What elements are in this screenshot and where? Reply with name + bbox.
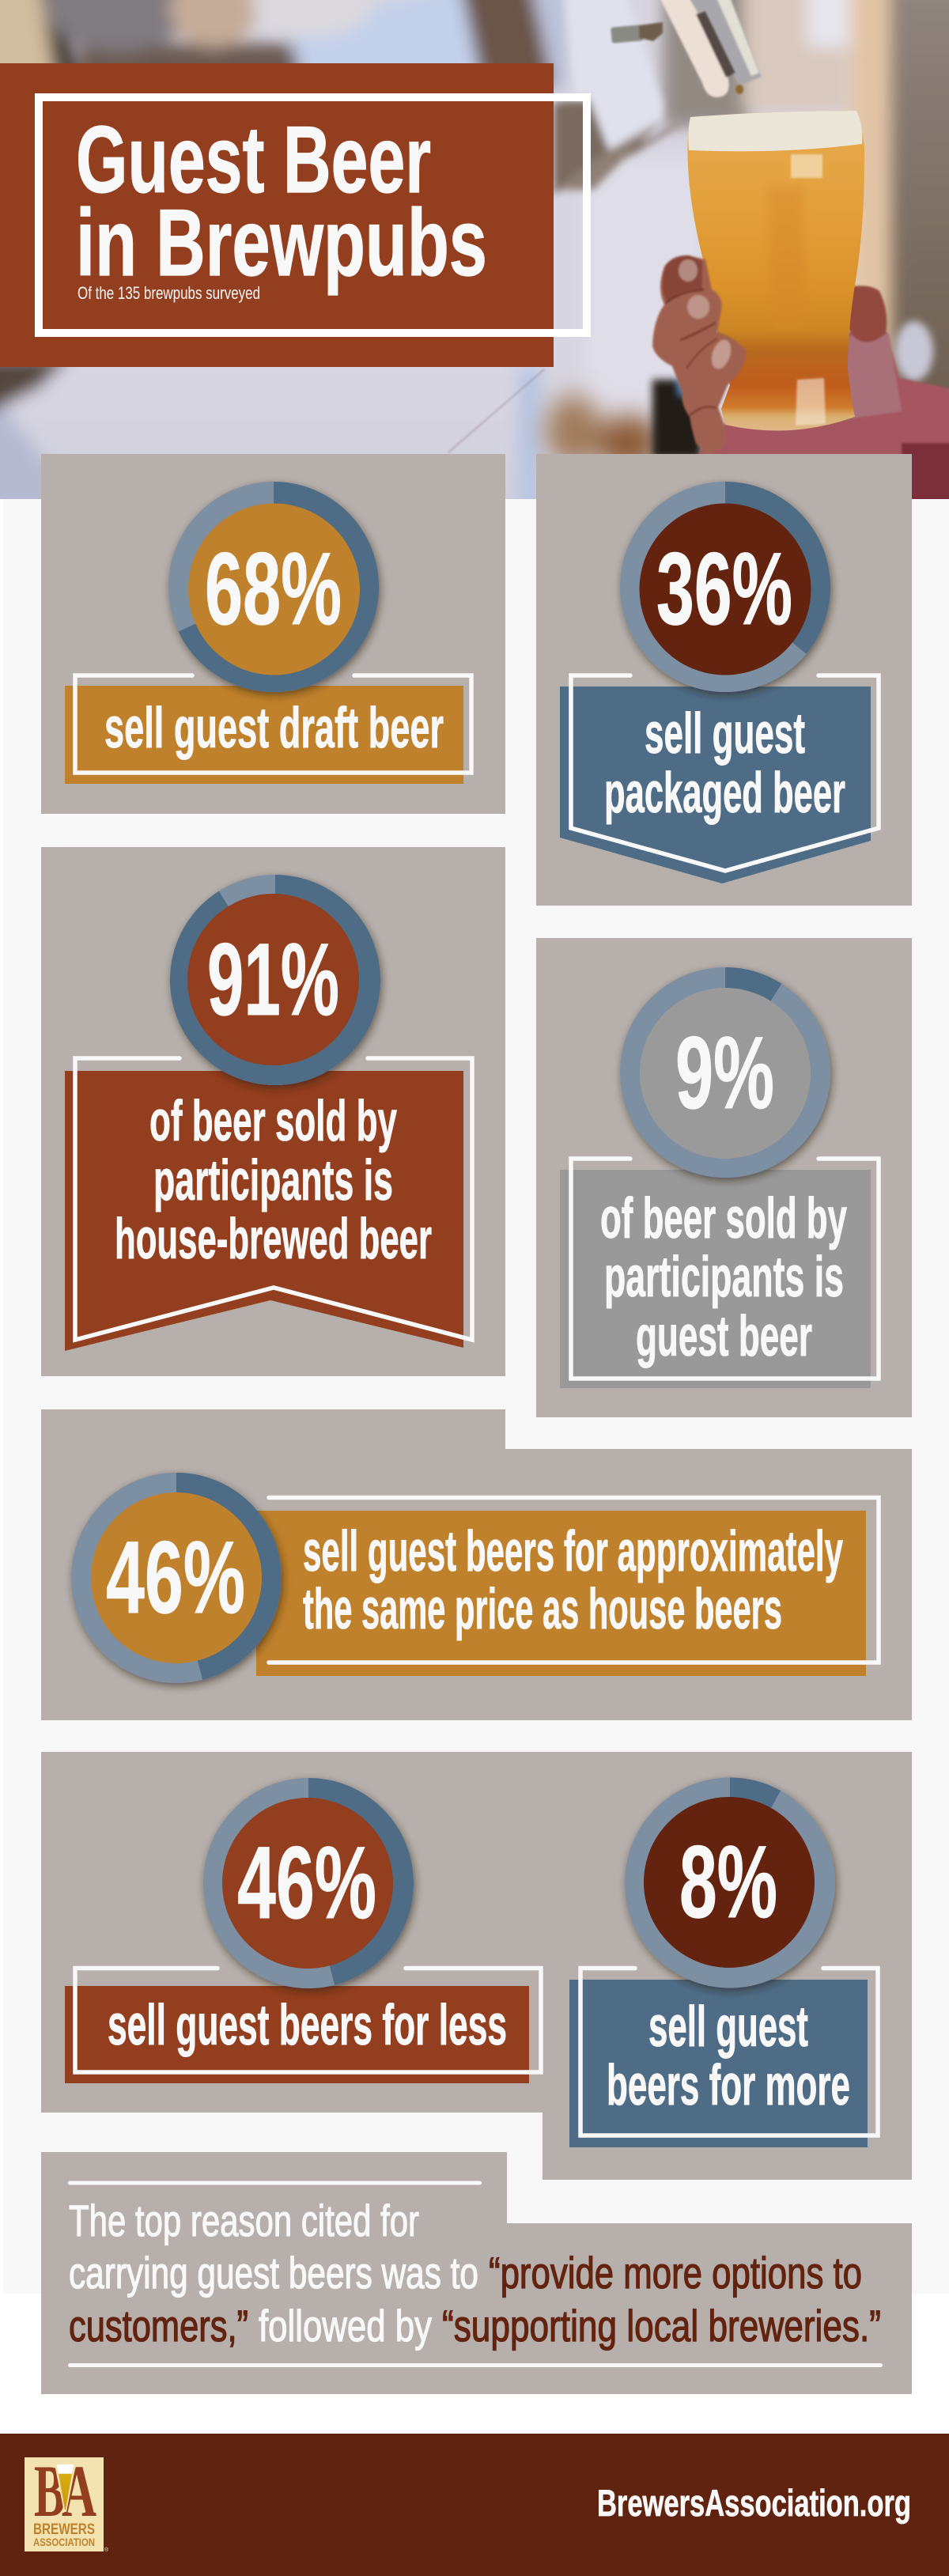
logo: Brewers Association: ASSOCIATION [33,2536,95,2548]
title [76,107,487,296]
panel: 68% sell guest draft beer [41,454,505,814]
icon: glass of beer [687,111,864,431]
donut chart 8% more: 8% [679,1824,777,1939]
label: sell for less: sell guest beers for less [108,1994,507,2057]
logo: Brewers Association: ® [104,2547,109,2553]
icon: fingers in front of glass [652,255,747,456]
page background [3,499,949,2294]
donut chart 9% [620,967,830,1178]
donut chart 9%: 9% [675,1015,774,1130]
ribbon [256,1511,866,1676]
panel: 36% sell guest packaged beer [536,454,912,906]
panel: top reason quote [41,2152,912,2394]
title: in Brewpubs [76,190,487,296]
frame [75,1058,472,1340]
label: sell guest [645,702,805,766]
label: house-brewed beer [115,1208,432,1271]
donut chart 36% [620,482,830,692]
panel: pricing 46% and 8% [41,1752,912,2180]
quote text [69,2196,881,2351]
ribbon: sell for less [65,1986,529,2083]
donut chart 8% more [625,1778,835,1988]
donut chart 46%: 46% [106,1519,245,1635]
label [600,1187,847,1368]
donut chart 68% [168,482,379,692]
label: sell guest draft beer [104,697,444,760]
quote text: The top reason cited for [69,2196,419,2245]
ribbon [65,1071,463,1351]
panel: 91% house-brewed beer [41,847,505,1376]
photo: beer glass held under a tap [0,0,949,522]
frame [75,675,471,773]
title: Guest Beer [76,107,431,213]
panel: 46% same price [41,1409,912,1720]
logo: Brewers Association [25,2451,109,2553]
label [303,1520,843,1641]
ribbon: sell for more [569,1980,868,2147]
donut chart 46% less: 46% [237,1825,376,1940]
frame: sell for more [580,1968,878,2135]
subtitle: Of the 135 brewpubs surveyed [78,283,260,303]
quote text: carrying guest beers was to [69,2248,478,2298]
donut chart 68%: 68% [205,531,342,646]
logo: Brewers Association: B [34,2451,65,2532]
ribbon [560,1170,871,1388]
ribbon [560,687,871,883]
label [115,1090,432,1271]
label: guest beer [636,1305,812,1368]
label: of beer sold by [149,1090,397,1153]
label: sell for more [607,1995,850,2117]
donut chart 91% [170,875,380,1085]
ribbon [65,686,463,784]
panel: 9% guest beer [536,938,912,1417]
label: sell for more: sell guest [648,1995,808,2059]
donut chart 91%: 91% [207,921,339,1037]
donut chart 36%: 36% [656,531,792,646]
logo: Brewers Association: BREWERS [33,2521,95,2538]
frame [571,675,879,871]
diagonal line in the photo background [448,369,544,452]
footer [0,2434,949,2576]
logo: Brewers Association: A [62,2451,96,2532]
label: participants is [153,1149,393,1212]
panel: title [0,63,587,367]
frame: sell for less [75,1968,541,2072]
donut chart 46% less [203,1778,414,1988]
title frame [39,97,587,333]
icon: hand behind the glass [696,286,949,522]
quote text: customers,” [69,2301,248,2351]
icon: beer tap [611,0,762,97]
quote text: followed by [259,2301,432,2351]
label [604,702,845,825]
donut chart 46% [71,1473,282,1683]
frame [269,1498,879,1662]
frame [571,1159,879,1379]
